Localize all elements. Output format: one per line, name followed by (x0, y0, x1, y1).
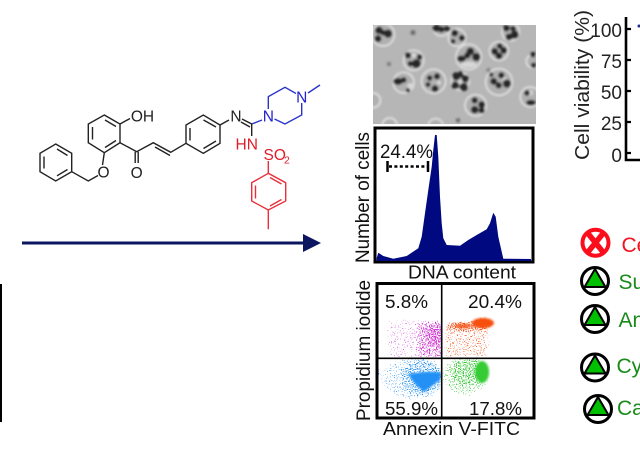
annexin / PI flow cytometry plot (354, 280, 534, 439)
quadrant percentages (385, 291, 522, 419)
piperazine group in blue (252, 85, 320, 126)
chemical structure (40, 85, 320, 229)
tick labels: 75 (601, 52, 622, 73)
tick labels: 0 (611, 146, 622, 167)
gate marker (388, 161, 428, 172)
DNA histogram panel (353, 128, 533, 282)
atom labels: black: O (97, 164, 110, 182)
icon: red cross (582, 230, 608, 256)
piperazine group in blue: N (296, 90, 307, 106)
gate label: 24.4% (380, 142, 433, 163)
icon: green triangle 1 (582, 268, 608, 294)
quadrant percentages: 5.8% (385, 291, 428, 312)
cell viability chart (571, 10, 640, 167)
tick labels: 100 (590, 21, 622, 42)
atom labels: black: N (230, 108, 242, 126)
cells (373, 25, 536, 124)
legend: pathway effects (582, 230, 640, 422)
micrograph of cells (373, 25, 536, 124)
blue population (375, 354, 445, 402)
orange dense core (455, 318, 494, 328)
histogram frame (375, 128, 533, 262)
green population (441, 353, 491, 397)
icon: green triangle 4 (584, 396, 612, 422)
blue dense core (408, 372, 441, 392)
magenta population (374, 318, 445, 360)
ticks (626, 29, 631, 153)
y axis title: Propidium iodide (354, 280, 375, 421)
tosyl group in red: HN (236, 136, 258, 154)
quadrant percentages: 20.4% (468, 291, 522, 312)
atom labels: black (97, 108, 242, 182)
y axis title: Number of cells (353, 132, 374, 263)
quadrant frame (377, 284, 534, 418)
data point (638, 24, 640, 28)
atom labels: black: O (131, 165, 143, 182)
plot background (377, 284, 534, 418)
orange population (443, 317, 494, 359)
tick labels: 25 (601, 114, 622, 135)
green dense core (475, 361, 489, 383)
benzyl and hydroxyphenyl chalcone core (40, 115, 252, 181)
tosyl group in red (236, 124, 290, 229)
quadrant percentages: 17.8% (469, 398, 522, 419)
y axis title: Cell viability (%) (571, 10, 594, 160)
histogram area (377, 135, 531, 261)
dark nuclei (375, 25, 536, 122)
axis lines (626, 17, 640, 160)
arrow (22, 234, 321, 252)
tosyl group in red: 2 (284, 154, 290, 166)
tick labels (590, 21, 622, 167)
light cytoplasm patches (407, 53, 533, 95)
icon: green triangle 2 (582, 306, 608, 332)
tick labels: 50 (601, 83, 622, 104)
piperazine group in blue: N (263, 108, 274, 126)
icon: green triangle 3 (582, 354, 608, 381)
x axis title: Annexin V-FITC (383, 418, 520, 439)
quadrant percentages: 55.9% (385, 398, 438, 419)
tosyl group in red: SO (264, 147, 286, 164)
x axis title: DNA content (408, 262, 516, 282)
left panel edge bar (0, 284, 2, 422)
atom labels: black: OH (131, 108, 154, 126)
